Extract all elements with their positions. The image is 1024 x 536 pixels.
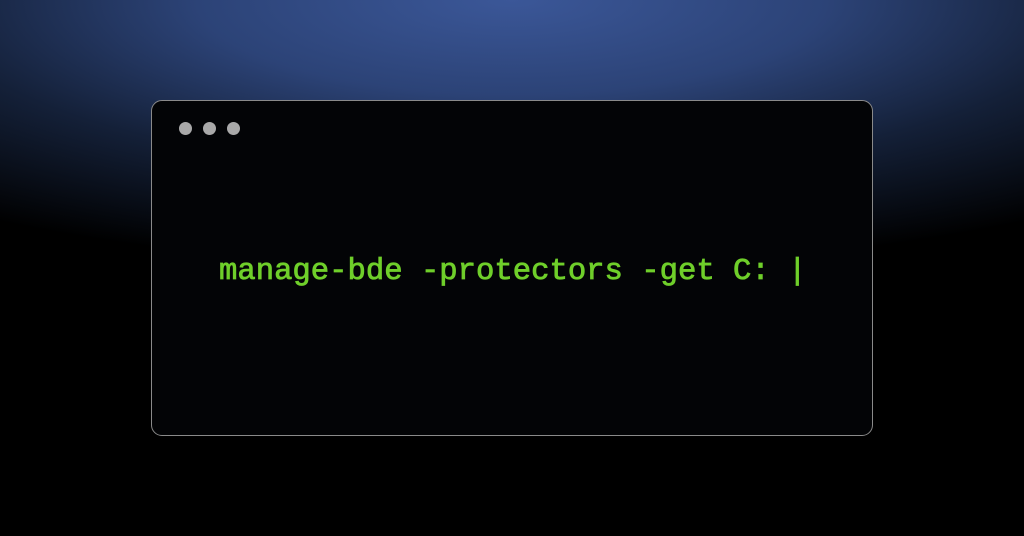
window control dots bbox=[179, 122, 240, 135]
command text: manage-bde -protectors -get C: | bbox=[219, 255, 806, 289]
terminal window bbox=[151, 100, 873, 436]
